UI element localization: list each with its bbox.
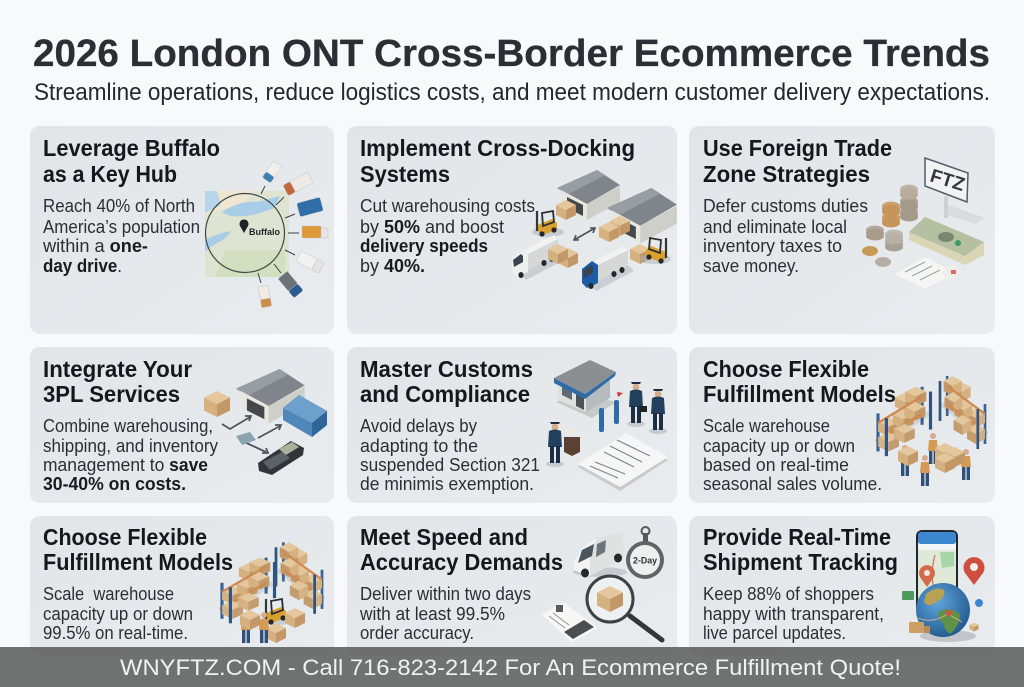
heading: and Compliance — [360, 381, 530, 407]
heading — [43, 356, 192, 407]
heading — [703, 356, 896, 407]
warehouses, forklifts and trucks — [512, 170, 677, 291]
panel: Cross-Docking — [347, 126, 677, 334]
heading: as a Key Hub — [43, 161, 177, 187]
heading: Use Foreign Trade — [703, 135, 892, 161]
map pin — [240, 219, 248, 233]
stopwatch: 2-Day — [633, 556, 658, 566]
body text: 99.5% on real-time. — [43, 623, 188, 643]
body text — [360, 196, 535, 276]
heading — [703, 524, 898, 575]
body text: adapting to the — [360, 436, 478, 456]
body text: Combine warehousing, — [43, 416, 213, 436]
body text: by 40%. — [360, 256, 425, 276]
shelving, forklift and workers — [218, 542, 326, 643]
handheld scanner — [258, 441, 304, 475]
body text: order accuracy. — [360, 623, 474, 643]
heading: Meet Speed and — [360, 524, 528, 550]
heading: 3PL Services — [43, 381, 180, 407]
heading: Systems — [360, 161, 450, 187]
heading — [43, 135, 220, 187]
heading: Integrate Your — [43, 356, 192, 382]
panel: Flexible Fulfillment (row 3) — [30, 516, 334, 655]
body text: delivery speeds — [360, 236, 488, 256]
trucks — [258, 161, 328, 308]
heading: Shipment Tracking — [703, 549, 898, 575]
body text: shipping, and inventory — [43, 436, 218, 456]
heading — [703, 135, 892, 187]
map with Buffalo hub and radiating trucks — [205, 161, 328, 308]
double arrow — [574, 228, 595, 240]
body text: capacity up or down — [703, 436, 855, 456]
body text — [359, 584, 531, 643]
heading — [43, 524, 233, 575]
warehouse, container, pallet and scanner — [204, 369, 327, 475]
body text: de minimis exemption. — [360, 474, 534, 494]
heading: Master Customs — [360, 356, 533, 382]
body text: within a one- — [42, 236, 148, 256]
documents — [578, 433, 668, 491]
body text — [42, 196, 200, 276]
body text: live parcel updates. — [703, 623, 846, 643]
body text: inventory taxes to — [703, 236, 842, 256]
heading — [360, 524, 563, 575]
customs booth — [554, 360, 616, 418]
body text — [703, 416, 882, 494]
body text — [703, 584, 884, 643]
body text: suspended Section 321 — [360, 455, 540, 475]
warehouse shelving and workers — [874, 376, 989, 486]
FTZ sign: FTZ — [928, 166, 967, 196]
magnifier with parcel — [587, 576, 662, 640]
body text: with at least 99.5% — [359, 604, 505, 624]
heading: Choose Flexible — [703, 356, 869, 382]
footer banner: WNYFTZ.COM - Call 716-823-2142 For An Ecommerce Fulfillment Quote! — [120, 655, 901, 680]
body text: Keep 88% of shoppers — [703, 584, 874, 604]
panel: 3PL Services — [30, 347, 334, 503]
body text — [360, 416, 540, 494]
body text: Scale warehouse — [43, 584, 174, 604]
heading: Implement Cross-Docking — [360, 135, 635, 161]
body text — [703, 196, 868, 276]
body text: Avoid delays by — [360, 416, 477, 436]
panel: Foreign Trade Zone — [689, 126, 995, 334]
body text: by 50% and boost — [360, 217, 504, 237]
map pins — [919, 557, 984, 616]
panel: Flexible Fulfillment (row 2) — [689, 347, 995, 503]
panel: Real-Time Tracking — [689, 516, 995, 655]
footer banner — [0, 647, 1024, 687]
heading: Choose Flexible — [43, 524, 207, 550]
body text: capacity up or down — [43, 604, 193, 624]
body text: Reach 40% of North — [43, 196, 195, 216]
heading: Accuracy Demands — [360, 549, 563, 575]
phone, globe, pins and parcel — [902, 530, 984, 642]
receipt label — [542, 602, 598, 642]
globe — [916, 583, 976, 642]
body text: seasonal sales volume. — [703, 474, 882, 494]
body text: save money. — [703, 256, 799, 276]
delivery van — [573, 532, 627, 578]
customs booth, officers and paperwork — [546, 360, 668, 491]
flow arrows — [222, 416, 281, 453]
heading: Leverage Buffalo — [43, 135, 220, 161]
map with Buffalo hub and radiating trucks: Buffalo — [249, 227, 280, 237]
panel: Speed and Accuracy — [347, 516, 677, 655]
body text: based on real-time — [703, 455, 849, 475]
heading: Fulfillment Models — [43, 549, 233, 575]
body text: and eliminate local — [703, 217, 847, 237]
heading: Fulfillment Models — [703, 381, 896, 407]
panel: Leverage Buffalo — [30, 126, 334, 334]
podium — [564, 428, 580, 456]
heading: Provide Real-Time — [703, 524, 891, 550]
heading: Zone Strategies — [703, 161, 870, 187]
body text: Deliver within two days — [360, 584, 531, 604]
container — [283, 395, 327, 437]
body text — [43, 584, 193, 643]
FTZ sign, coins, cash and documents — [862, 158, 985, 289]
body text: management to save — [43, 455, 208, 475]
body text: Cut warehousing costs — [360, 196, 535, 216]
body text: Scale warehouse — [703, 416, 830, 436]
van, stopwatch, magnifier and label — [542, 527, 664, 642]
body text: America’s population — [43, 217, 200, 237]
small delivery truck — [909, 622, 930, 633]
title: 2026 London ONT Cross-Border Ecommerce Trends — [33, 33, 990, 75]
body text — [43, 416, 218, 494]
phone — [916, 530, 958, 614]
heading — [360, 356, 533, 407]
body text: happy with transparent, — [703, 604, 884, 624]
subtitle: Streamline operations, reduce logistics costs, and meet modern customer delivery expectations. — [34, 79, 990, 106]
body text: 30-40% on costs. — [43, 474, 186, 494]
heading — [360, 135, 635, 187]
panel: Customs — [347, 347, 677, 503]
body text: day drive. — [43, 256, 122, 276]
body text: Defer customs duties — [703, 196, 868, 216]
